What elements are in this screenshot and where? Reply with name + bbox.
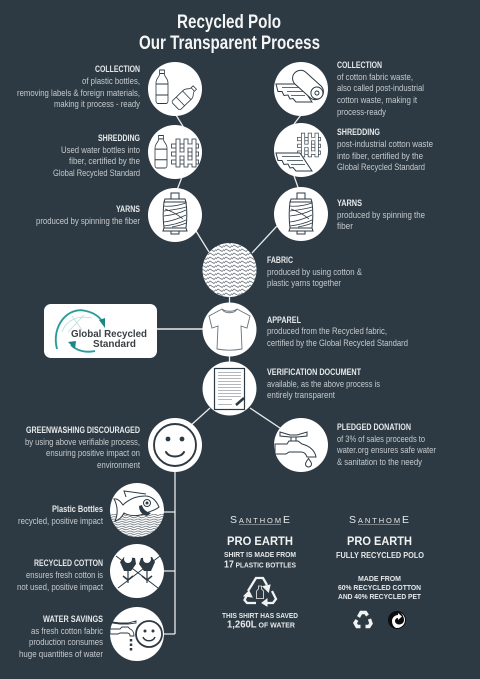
right collection text: process-ready [337,106,386,117]
right collection text: COLLECTION [337,60,382,70]
fabric text: produced by using cotton & [267,266,363,277]
left yarns text [36,204,140,226]
water savings text [19,614,103,659]
greenwashing text: by using above verifiable process, [25,436,140,447]
right product label [336,514,424,628]
icon: right yarn spool [274,187,328,241]
left yarns text: YARNS [116,204,140,214]
apparel text: APPAREL [267,315,301,325]
water saved: 1,260L OF WATER [227,620,296,630]
left collection text [17,64,140,109]
connector lines [157,115,301,634]
icon: t-shirt [202,302,256,356]
icon: fabric roll [274,62,328,116]
apparel text: certified by the Global Recycled Standard [267,337,408,348]
heading: PRO EARTH [347,536,412,548]
icon: recycling triangle with bottle [244,578,276,606]
water savings text: as fresh cotton fabric [31,625,103,636]
icon: fabric swatch [202,243,256,297]
icon: crossed-out cotton [110,544,164,598]
greenwashing text: environment [97,459,140,470]
bottle count: 17 PLASTIC BOTTLES [224,560,296,570]
verification text: VERIFICATION DOCUMENT [267,367,361,377]
icon: green dot [388,612,406,628]
right collection text: of cotton fabric waste, [337,71,413,82]
water savings text: production consumes [29,636,103,647]
icon: water tap [274,418,328,472]
water savings text: WATER SAVINGS [43,614,103,624]
icon: recycling symbol [355,612,371,626]
right collection text: also called post-industrial [337,82,424,93]
bottle count [224,550,296,570]
title: Recycled Polo [177,11,281,33]
apparel text [267,315,408,348]
pledged donation text: water.org ensures safe water [336,444,436,455]
icon: verification document [202,362,256,416]
left yarns text: produced by spinning the fiber [36,215,140,226]
pledged donation text: PLEDGED DONATION [337,422,411,432]
icon: bottle to fibre [148,125,202,179]
recycled cotton text: RECYCLED COTTON [34,558,103,568]
right yarns text: produced by spinning the [337,209,425,220]
right yarns text [337,198,425,231]
brand: Santhome: S ANTHOME [230,514,290,526]
pledged donation text: & sanitation to the needy [337,456,422,467]
right yarns text: fiber [337,220,353,231]
right shredding text: SHREDDING [337,127,380,137]
right shredding text: post-industrial cotton waste [337,138,433,149]
plastic bottles text [18,504,103,526]
left shredding text: Global Recycled Standard [53,167,140,178]
greenwashing text: ensuring positive impact on [46,447,140,458]
water savings text: huge quantities of water [19,648,103,659]
left shredding text: Used water bottles into [61,144,140,155]
recycled cotton text [17,558,103,592]
plastic bottles text: Plastic Bottles [52,504,103,514]
verification text: entirely transparent [267,389,335,400]
icon: fish in water [110,483,164,538]
left collection text: making it process - ready [54,98,140,109]
Global Recycled Standard logo: Standard [93,338,136,350]
water saved [222,611,299,630]
Global Recycled Standard logo: Global Recycled [71,328,147,340]
composition: 60% RECYCLED COTTON [338,583,421,592]
right collection text [337,60,424,117]
right shredding text: into fiber, certified by the [337,150,423,161]
title [139,11,320,54]
composition: MADE FROM [358,574,401,583]
pledged donation text [336,422,436,467]
apparel text: produced from the Recycled fabric, [267,325,387,336]
composition [338,574,421,601]
greenwashing text: GREENWASHING DISCOURAGED [26,425,140,435]
left shredding text: fiber, certified by the [69,155,140,166]
recycled cotton text: not used, positive impact [17,581,103,592]
right shredding text [337,127,433,172]
left collection text: of plastic bottles, [82,75,140,86]
fabric text: plastic yarns together [267,277,341,288]
heading: PRO EARTH [227,536,293,548]
right shredding text: Global Recycled Standard [337,161,425,172]
left product label [222,514,299,630]
brand: Santhome: S ANTHOME [349,514,409,526]
title: Our Transparent Process [139,32,320,54]
icon: smiley [148,418,202,472]
left shredding text: SHREDDING [98,133,140,143]
fabric text [267,255,363,288]
Global Recycled Standard logo [44,304,157,358]
right collection text: cotton waste, making it [337,94,417,105]
composition: AND 40% RECYCLED PET [338,592,421,601]
plastic bottles text: recycled, positive impact [18,515,103,526]
bottle count: SHIRT IS MADE FROM [224,550,296,559]
left collection text: removing labels & foreign materials, [17,87,140,98]
icon: plastic bottles [148,62,202,116]
recycled cotton text: ensures fresh cotton is [26,569,103,580]
verification text [267,367,380,400]
pledged donation text: of 3% of sales proceeds to [337,433,425,444]
greenwashing text [25,425,140,470]
left collection text: COLLECTION [95,64,140,74]
icon: tap and smiley [110,607,164,661]
subheading: FULLY RECYCLED POLO [336,551,424,560]
icon: fabric to fibre [274,123,328,177]
verification text: available, as the above process is [267,378,380,389]
right yarns text: YARNS [337,198,362,208]
icon: left yarn spool [148,188,202,242]
left shredding text [53,133,140,178]
water saved: THIS SHIRT HAS SAVED [222,611,299,620]
fabric text: FABRIC [267,255,293,265]
